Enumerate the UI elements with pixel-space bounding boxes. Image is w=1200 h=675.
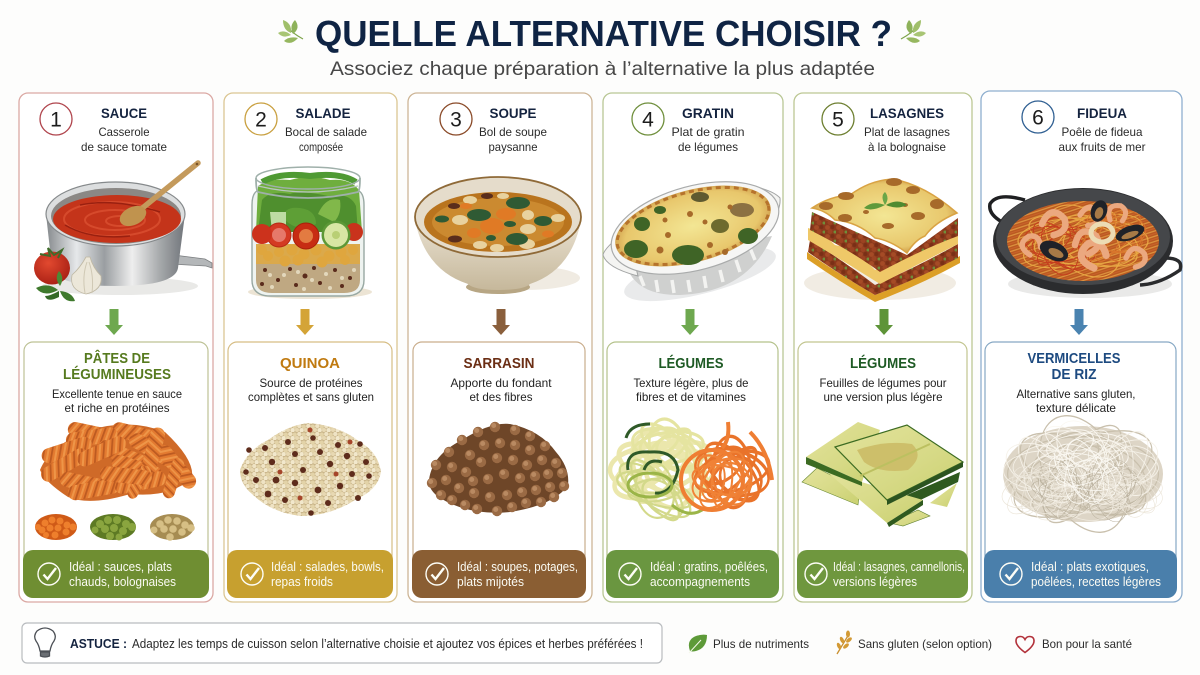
ideal band: Idéal : salades, bowls,	[271, 560, 384, 574]
description: Apporte du fondant	[450, 376, 552, 390]
heading: gratin: de légumes	[678, 140, 738, 154]
illustration: lasagna	[804, 178, 960, 302]
ideal band	[797, 550, 968, 598]
icon: wheat	[836, 630, 853, 654]
arrow	[1070, 309, 1088, 335]
illustration: vegetable spirals	[601, 403, 781, 541]
number badge 6: 6	[1032, 106, 1044, 130]
alternative panel: feuilles de legumes	[798, 342, 967, 567]
tip text: ASTUCE :	[70, 636, 127, 651]
legend: nutriments	[689, 635, 809, 653]
description: Alternative sans gluten,	[1016, 387, 1136, 401]
heading: VERMICELLES	[1028, 351, 1121, 367]
ideal band: Idéal : gratins, poêlées,	[650, 560, 768, 574]
heading: LÉGUMINEUSES	[63, 366, 171, 383]
heading: lasagnes	[864, 105, 950, 154]
icon: light bulb	[35, 628, 55, 657]
heading: soupe: Bol de soupe	[479, 125, 547, 139]
heading: sauce	[81, 105, 167, 154]
ideal band	[23, 550, 209, 598]
ideal band: accompagnements	[650, 575, 750, 589]
number badge 5: 5	[832, 108, 844, 132]
ideal band: chauds, bolognaises	[69, 575, 176, 589]
legend: nutriments: Plus de nutriments	[713, 637, 809, 651]
heading: gratin: Plat de gratin	[672, 125, 744, 139]
heading: soupe	[479, 105, 547, 154]
heading	[63, 349, 171, 383]
number badge 6	[1022, 101, 1054, 133]
ideal band	[227, 550, 393, 598]
ideal band: Idéal : lasagnes, cannellonis,	[833, 560, 965, 574]
illustration: buckwheat pile	[427, 422, 569, 516]
heading	[1028, 351, 1121, 383]
heading: salade: Bocal de salade	[285, 125, 367, 139]
ideal band	[412, 550, 586, 598]
illustration: fideua pan	[990, 188, 1181, 298]
heading: soupe: SOUPE	[490, 105, 536, 121]
heading: salade	[285, 105, 367, 154]
illustration: quinoa pile	[240, 423, 381, 516]
description: et riche en protéines	[64, 401, 170, 415]
illustration: rice vermicelli	[987, 397, 1180, 551]
ideal band: Idéal : sauces, plats	[69, 560, 172, 574]
alternative panel: pates de legumineuses	[24, 342, 208, 567]
legend: sans gluten	[836, 630, 992, 654]
arrow	[681, 309, 699, 335]
ideal band: Idéal : soupes, potages,	[457, 560, 578, 574]
arrow	[875, 309, 893, 335]
heading: DE RIZ	[1052, 367, 1097, 383]
heading: fideua	[1058, 105, 1146, 154]
number badge 3: 3	[450, 108, 462, 132]
number badge 1: 1	[50, 108, 62, 132]
title: QUELLE ALTERNATIVE CHOISIR ?	[315, 13, 892, 54]
legend: sans gluten: Sans gluten (selon option)	[858, 637, 992, 651]
number badge 4	[632, 103, 664, 135]
panel: 6 fideua	[981, 91, 1182, 602]
heading: lasagnes: LASAGNES	[870, 105, 944, 121]
heading: lasagnes: Plat de lasagnes	[864, 125, 950, 139]
alternative panel: quinoa	[228, 342, 392, 567]
ideal band: plats mijotés	[457, 575, 524, 589]
subtitle: Associez chaque préparation à l’alternative la plus adaptée	[330, 58, 875, 80]
description	[52, 387, 182, 415]
arrow	[105, 309, 123, 335]
ideal band	[606, 550, 779, 598]
alternative panel: legumes spirales	[601, 342, 781, 567]
tip text: Adaptez les temps de cuisson selon l’alternative choisie et ajoutez vos épices et herbes préférées !	[132, 637, 643, 651]
heading: QUINOA	[280, 356, 341, 372]
arrow	[296, 309, 314, 335]
heading: fideua: Poêle de fideua	[1062, 125, 1143, 139]
description	[634, 376, 749, 404]
illustration: salad jar	[248, 167, 372, 299]
number badge 2: 2	[255, 108, 267, 132]
description: Excellente tenue en sauce	[52, 387, 182, 401]
ideal band: versions légères	[833, 575, 917, 589]
description: Feuilles de légumes pour	[820, 376, 946, 390]
panel: 4 gratin	[601, 93, 789, 602]
alternative panel: vermicelles de riz	[985, 342, 1180, 567]
heading: gratin	[672, 105, 744, 154]
heading: lasagnes: à la bolognaise	[868, 140, 946, 154]
panel: 5 lasagnes	[794, 93, 972, 602]
heading: sauce: SAUCE	[101, 105, 147, 121]
description: texture délicate	[1036, 401, 1116, 415]
description: complètes et sans gluten	[248, 390, 374, 404]
heading: fideua: FIDEUA	[1077, 105, 1127, 121]
heading: sauce: de sauce tomate	[81, 140, 167, 154]
number badge 2	[245, 103, 277, 135]
ideal band: poêlées, recettes légères	[1031, 575, 1161, 589]
description: une version plus légère	[824, 390, 943, 404]
icon: left leaf sprig	[278, 20, 303, 43]
legend: sante	[1016, 636, 1132, 652]
description: et des fibres	[470, 390, 532, 404]
panel: 2 salade	[224, 93, 397, 602]
number badge 1	[40, 103, 72, 135]
heading: salade: composée	[299, 140, 343, 154]
description	[820, 376, 946, 404]
description	[1016, 387, 1136, 415]
illustration: saucepan	[34, 163, 212, 301]
heading: LÉGUMES	[850, 355, 916, 372]
ideal band: repas froids	[271, 575, 333, 589]
heading: salade: SALADE	[296, 105, 350, 121]
icon: right leaf sprig	[901, 20, 926, 43]
icon: heart	[1016, 636, 1034, 652]
heading: gratin: GRATIN	[682, 105, 734, 121]
arrow	[492, 309, 510, 335]
description: Texture légère, plus de	[634, 376, 749, 390]
icon: leaf	[689, 635, 707, 653]
panel: 1 sauce	[19, 93, 213, 602]
illustration: zucchini slices	[802, 422, 963, 527]
legend: sante: Bon pour la santé	[1042, 637, 1132, 651]
heading: sauce: Casserole	[98, 125, 150, 139]
panel: 3 soupe	[408, 93, 592, 602]
description: fibres et de vitamines	[636, 390, 746, 404]
tip box	[22, 623, 662, 663]
description	[450, 376, 552, 404]
heading: fideua: aux fruits de mer	[1058, 140, 1146, 154]
ideal band: Idéal : plats exotiques,	[1031, 560, 1149, 574]
illustration: fusilli and legumes	[35, 421, 199, 541]
alternative panel: sarrasin	[413, 342, 585, 567]
heading: LÉGUMES	[658, 355, 724, 372]
description	[248, 376, 374, 404]
number badge 4: 4	[642, 108, 654, 132]
illustration: soup bowl	[415, 177, 581, 294]
ideal band	[984, 550, 1177, 598]
number badge 5	[822, 103, 854, 135]
heading: soupe: paysanne	[488, 140, 538, 154]
number badge 3	[440, 103, 472, 135]
illustration: gratin dish	[601, 165, 789, 312]
heading: SARRASIN	[464, 356, 534, 372]
heading: PÂTES DE	[84, 349, 150, 367]
description: Source de protéines	[260, 376, 362, 390]
